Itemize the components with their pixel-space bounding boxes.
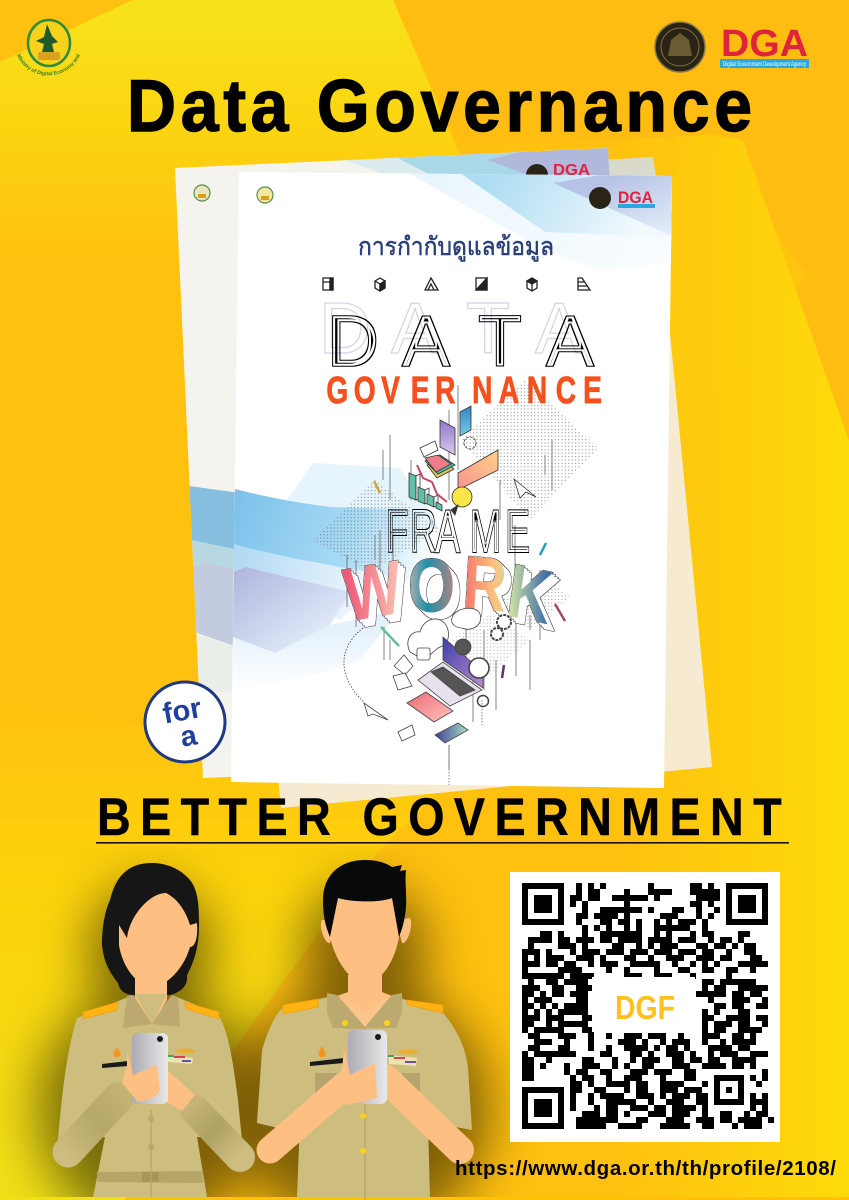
gears <box>491 615 511 640</box>
trend arrow <box>417 465 447 502</box>
hair <box>102 863 199 995</box>
lock <box>417 648 430 660</box>
brain <box>452 608 481 629</box>
placket <box>150 1110 152 1197</box>
hand <box>330 1048 377 1105</box>
light bulb <box>451 487 472 515</box>
monitor <box>458 450 498 490</box>
buttons <box>148 1116 154 1150</box>
FRAME outlined letters: FRAME <box>386 498 530 565</box>
cloud <box>408 619 449 660</box>
buttons <box>342 1020 390 1154</box>
collar <box>327 993 402 1028</box>
front cover page <box>231 172 672 788</box>
coin <box>469 658 489 678</box>
WORK 3D letters: WORK <box>340 540 558 641</box>
illustration: upper devices <box>374 406 536 515</box>
back page: left: DGA <box>553 162 590 179</box>
cover swooshes <box>233 172 672 688</box>
rings <box>464 437 476 449</box>
insignia <box>113 1047 195 1064</box>
logo: DGA: Digital Government Development Agency <box>723 61 807 68</box>
ghost DATA letters: DATA <box>319 289 583 369</box>
phone device <box>460 406 471 436</box>
near hand <box>122 1050 160 1102</box>
collar <box>123 995 180 1028</box>
QR code panel <box>510 872 780 1142</box>
paper plane <box>514 479 536 498</box>
figure: female official <box>58 863 242 1197</box>
back page: left <box>175 148 640 778</box>
phone <box>348 1030 387 1104</box>
smartphone <box>435 723 468 743</box>
logo: government seal <box>655 22 705 72</box>
pink tablet <box>407 692 453 722</box>
title: Data Governance <box>127 65 752 147</box>
cover logo: ministry <box>257 187 273 203</box>
magnifier <box>478 696 488 706</box>
illustration: lower devices <box>344 543 565 743</box>
arms <box>270 1078 460 1150</box>
cover Thai title: การกำกับดูแลข้อมูล <box>358 233 554 262</box>
shadow behind officials <box>38 884 490 1200</box>
URL: https://www.dga.or.th/th/profile/2108/ <box>455 1157 836 1180</box>
QR modules <box>522 886 774 1126</box>
vertical tech lines <box>347 385 552 785</box>
far hand <box>160 1068 195 1111</box>
pencil <box>374 481 380 493</box>
cover logo: DGA: DGA <box>618 188 653 207</box>
epaulets <box>283 999 443 1014</box>
left sleeve <box>68 1098 118 1152</box>
envelope <box>420 441 438 457</box>
cover small cube icons <box>323 278 590 291</box>
halftone diamonds <box>312 380 598 675</box>
face <box>119 893 197 987</box>
laptop base <box>418 662 482 706</box>
badge: for a: for <box>160 692 204 730</box>
logo: ministry seal <box>17 18 80 76</box>
globe <box>455 639 471 655</box>
insignia <box>318 1046 418 1066</box>
paper plane <box>364 703 388 720</box>
orbit arc <box>344 628 364 702</box>
heading: better government: BETTER GOVERNMENT <box>97 787 782 847</box>
back page logo <box>194 185 210 201</box>
belt <box>97 1171 203 1183</box>
book stack <box>425 455 455 478</box>
epaulets <box>83 1002 219 1019</box>
camera card <box>398 725 415 741</box>
name bar <box>102 1061 128 1068</box>
right sleeve <box>195 1110 240 1157</box>
laptop screen <box>443 637 483 688</box>
badge: for a <box>145 682 225 762</box>
neck <box>337 975 392 1027</box>
GOVERNANCE: GOVERNANCE <box>326 370 602 412</box>
tablet device <box>440 420 455 455</box>
name bar <box>310 1058 344 1066</box>
marker pens <box>381 543 565 678</box>
phone <box>132 1033 168 1104</box>
pockets <box>315 1073 420 1101</box>
bar chart <box>409 473 442 511</box>
neck <box>135 975 167 1025</box>
badge: for a: a <box>178 719 200 754</box>
DATA outlined letters: DATA <box>327 302 594 382</box>
hair <box>323 860 406 937</box>
uniform <box>58 995 242 1197</box>
heading underline <box>96 842 789 844</box>
ears <box>321 918 411 943</box>
figure: male official <box>257 860 472 1200</box>
cover logo: seal <box>589 187 611 209</box>
face <box>330 890 399 985</box>
documents <box>393 655 413 690</box>
QR centre label: DGF <box>615 989 675 1026</box>
back page: cream <box>225 157 712 808</box>
logo: DGA: DGA <box>721 23 808 65</box>
uniform <box>257 995 472 1197</box>
